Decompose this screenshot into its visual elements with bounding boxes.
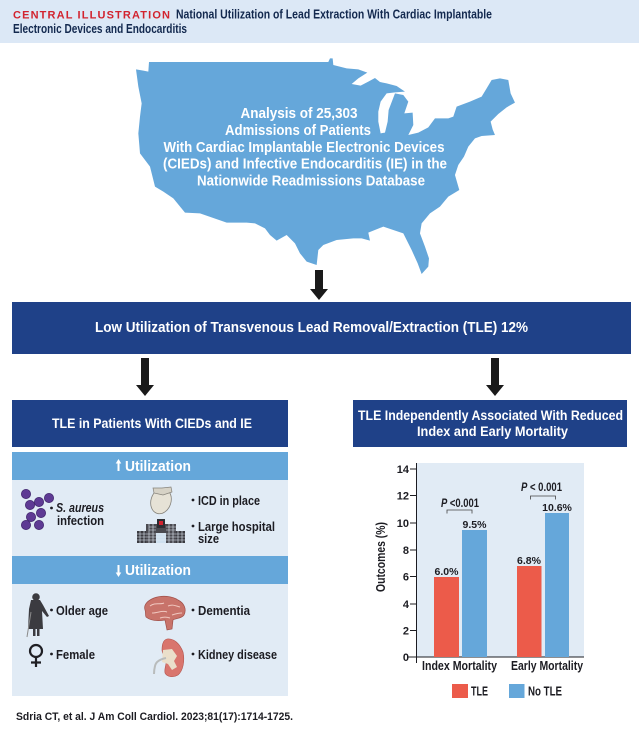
- arrow: map to utilization: [310, 270, 328, 300]
- panel background: utilization factors: [12, 452, 288, 696]
- y tick labels: 10: [397, 518, 409, 530]
- y tick labels: 0: [403, 652, 409, 664]
- icon: brain: [145, 596, 185, 630]
- label: ICD in place: ICD in place: [198, 493, 260, 508]
- y tick labels: 14: [397, 464, 410, 476]
- icon: hospital: [137, 519, 185, 543]
- header title: [13, 8, 492, 36]
- y tick labels: 4: [403, 599, 410, 611]
- icon: heart with ICD: [147, 486, 175, 516]
- band: decreased utilization: [12, 556, 288, 584]
- label: large hospital size: [192, 519, 275, 546]
- x axis labels: [422, 659, 583, 673]
- icon: female symbol: [30, 645, 42, 667]
- bars: index mortality: [434, 519, 487, 657]
- label: S. aureus infection: infection: [57, 513, 104, 528]
- arrow: left branch: [136, 358, 154, 396]
- label: S. aureus infection: S. aureus: [56, 500, 104, 515]
- y tick labels: 6: [403, 572, 409, 584]
- map text: [163, 106, 447, 190]
- bars: early mortality: 10.6%: [542, 502, 573, 514]
- legend: [452, 684, 562, 698]
- icon: S. aureus bacteria: [21, 489, 54, 530]
- map text: Admissions of Patients: [225, 123, 371, 139]
- y tick labels: [397, 464, 410, 664]
- map text: Nationwide Readmissions Database: [197, 174, 425, 190]
- bars: index mortality: 6.0%: [435, 566, 459, 578]
- label: female: Female: [56, 647, 95, 662]
- band: increased utilization: [12, 452, 288, 480]
- heading: mortality: [353, 400, 627, 447]
- y tick labels: 12: [397, 490, 409, 502]
- icon: older person with cane: [27, 593, 49, 637]
- label: kidney disease: Kidney disease: [198, 647, 277, 662]
- heading: mortality: TLE Independently Associated With Reduced: [358, 408, 623, 423]
- axes: [407, 463, 584, 663]
- map text: (CIEDs) and Infective Endocarditis (IE) in the: [163, 156, 447, 172]
- map shape: [136, 58, 515, 274]
- header title: Electronic Devices and Endocarditis: [13, 22, 187, 36]
- p value: early mortality: P < 0.001: [521, 482, 562, 494]
- map text: Analysis of 25,303: [240, 106, 358, 122]
- bars: early mortality: 6.8%: [517, 555, 542, 567]
- panel: TLE in patients: [12, 400, 288, 696]
- banner: low utilization: [12, 302, 631, 354]
- label: S. aureus infection: [50, 500, 104, 528]
- bars: early mortality: [517, 502, 573, 657]
- label: large hospital size: Large hospital: [198, 519, 275, 534]
- p value: index mortality: [441, 498, 479, 514]
- bar chart: outcomes: [374, 463, 584, 698]
- banner: low utilization: Low Utilization of Transvenous Lead Removal/Extraction (TLE) 12%: [95, 320, 528, 336]
- arrow: right branch: [486, 358, 504, 396]
- p value: index mortality: P <0.001: [441, 498, 479, 510]
- band: decreased utilization: Utilization: [125, 563, 191, 579]
- header band: [0, 0, 639, 43]
- panel heading: [12, 400, 288, 447]
- legend: No TLE: [528, 684, 562, 698]
- legend: TLE: [471, 684, 488, 698]
- x axis labels: Early Mortality: [511, 659, 583, 673]
- x axis labels: Index Mortality: [422, 659, 497, 673]
- p value: early mortality: [521, 482, 562, 500]
- panel heading: TLE in Patients With CIEDs and IE: [52, 415, 252, 431]
- citation: Sdria CT, et al. J Am Coll Cardiol. 2023;81(17):1714-1725.: [16, 711, 293, 723]
- label: dementia: Dementia: [198, 603, 251, 618]
- label: large hospital size: size: [198, 531, 219, 546]
- header label: central illustration: CENTRAL ILLUSTRATION: [13, 10, 170, 22]
- band: increased utilization: Utilization: [125, 459, 191, 475]
- map text: With Cardiac Implantable Electronic Devices: [164, 140, 444, 156]
- label: older age: Older age: [56, 603, 108, 618]
- bars: index mortality: 9.5%: [463, 519, 487, 531]
- icon: kidney: [154, 639, 184, 677]
- US map with study population: [136, 58, 515, 274]
- y tick labels: 2: [403, 626, 409, 638]
- y tick labels: 8: [403, 545, 409, 557]
- heading: mortality: Index and Early Mortality: [417, 424, 568, 439]
- header title: National Utilization of Lead Extraction With Cardiac Implantable: [176, 8, 492, 22]
- y axis title: Outcomes (%): [374, 522, 388, 592]
